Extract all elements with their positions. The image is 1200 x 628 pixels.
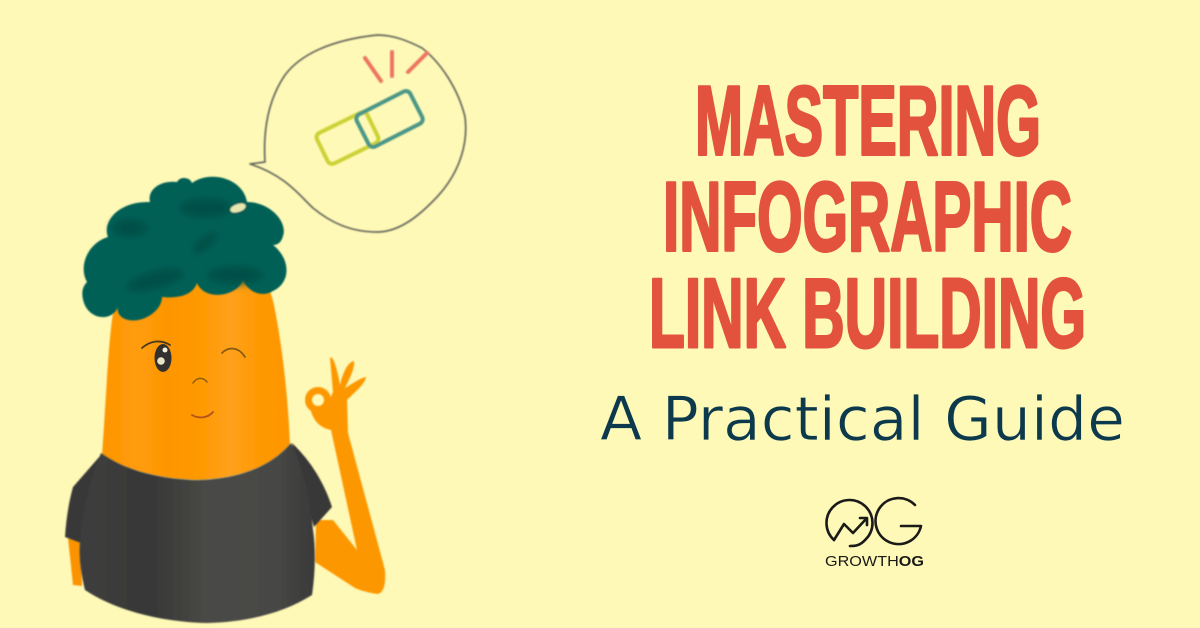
subtitle: A Practical Guide [600, 384, 1125, 455]
nose [193, 378, 207, 383]
hair shading [112, 198, 263, 296]
eyebrow [142, 341, 170, 348]
right arm and hand [308, 357, 385, 594]
hair mass [82, 177, 287, 320]
logo mark [826, 498, 921, 546]
character [65, 177, 385, 623]
logo wordmark: GROWTH OG [825, 554, 924, 570]
hair highlight [229, 202, 247, 214]
smile [192, 412, 213, 417]
link icon: yellow rectangle [315, 110, 380, 166]
bubble outline [250, 35, 466, 232]
torso [80, 443, 315, 623]
speech bubble [250, 35, 466, 232]
OK-sign finger ring [308, 390, 328, 410]
face [142, 341, 245, 417]
head [102, 228, 290, 480]
hair [82, 177, 287, 320]
link icon: green rectangle [355, 89, 424, 149]
shirt [65, 443, 332, 623]
left arm [68, 538, 82, 586]
left eye [154, 344, 172, 372]
sleeves [65, 443, 332, 543]
logo: GrowthOG [825, 498, 924, 570]
spark lines [365, 52, 427, 81]
winking eye [222, 349, 245, 357]
title [649, 66, 1086, 368]
